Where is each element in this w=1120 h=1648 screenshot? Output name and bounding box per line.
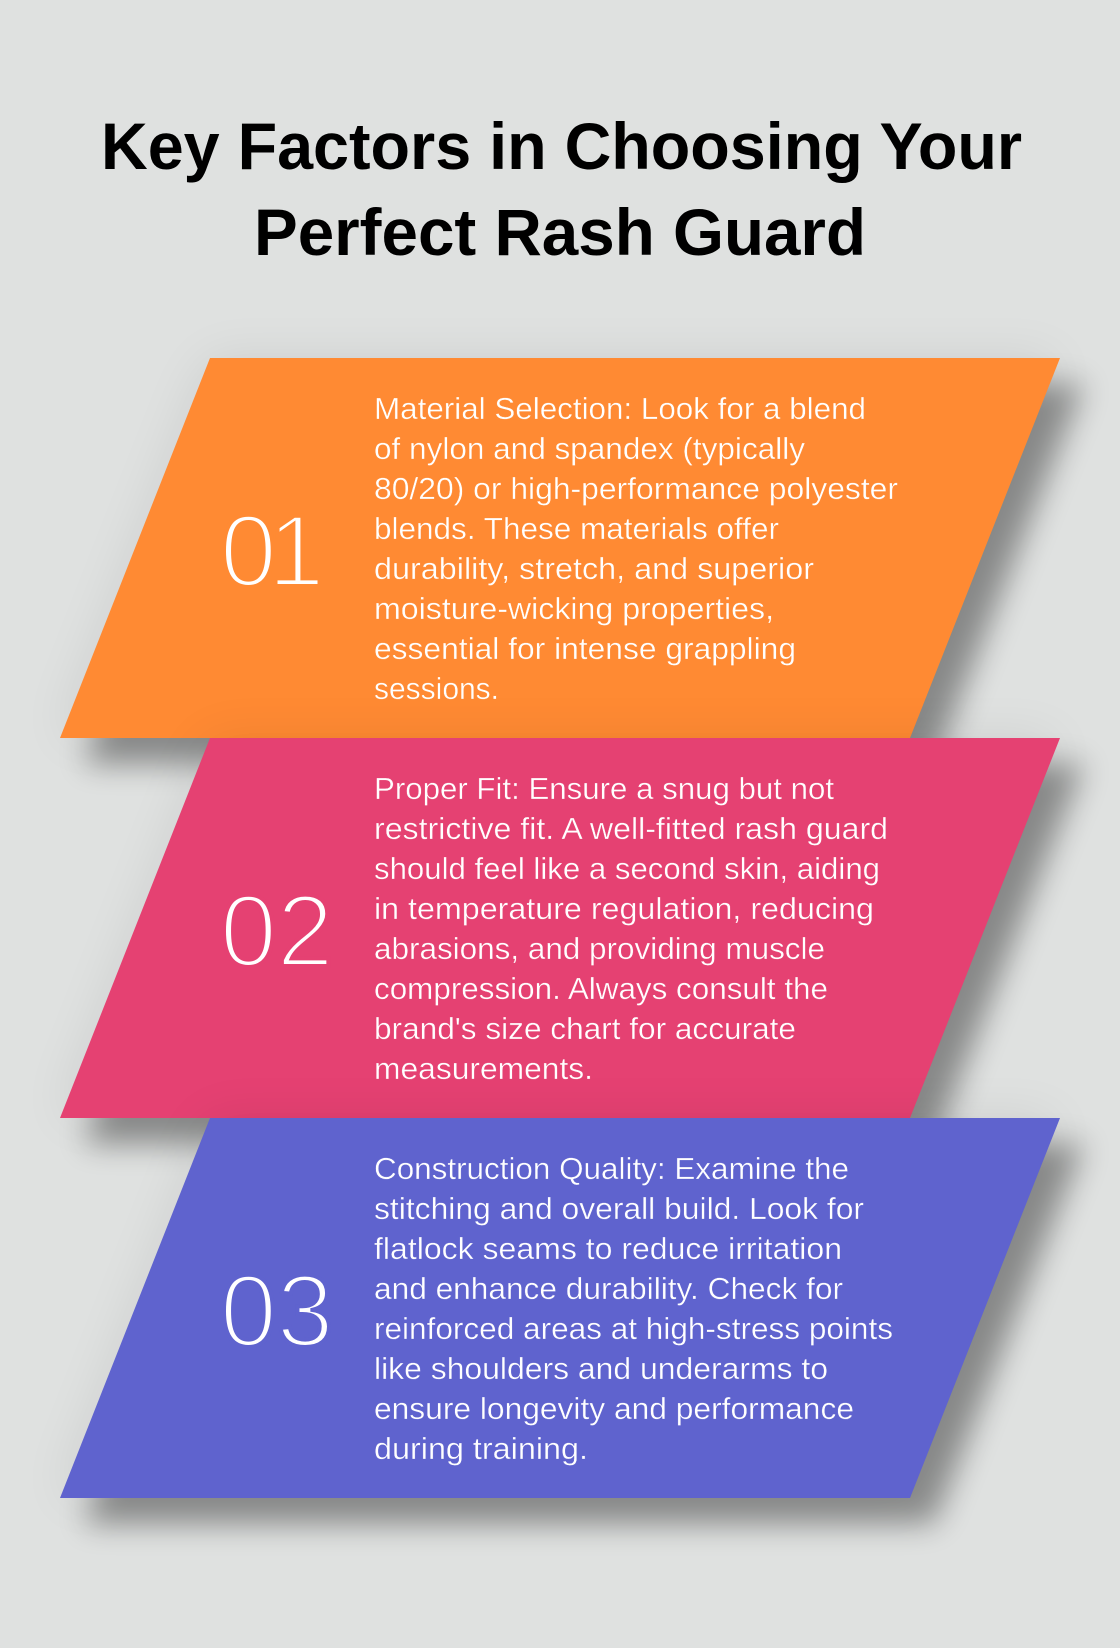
panel 01 text: of nylon and spandex (typically	[374, 432, 806, 466]
panel 03 shadow	[60, 1118, 1084, 1524]
panel 03 text: during training.	[374, 1432, 588, 1466]
panel 03 text: reinforced areas at high-stress points	[374, 1312, 893, 1346]
panel 03 text: stitching and overall build. Look for	[374, 1192, 864, 1226]
panel 03 text: flatlock seams to reduce irritation	[374, 1232, 842, 1266]
panel 03 text: like shoulders and underarms to	[374, 1352, 828, 1386]
title: Perfect Rash Guard	[254, 195, 866, 269]
panel 01 parallelogram	[60, 358, 1060, 738]
number 02: 02	[220, 874, 333, 988]
panel 02 text: measurements.	[374, 1052, 593, 1086]
panel 02 text: in temperature regulation, reducing	[374, 892, 874, 926]
panel 03 text: and enhance durability. Check for	[374, 1272, 843, 1306]
panel 02 text: brand's size chart for accurate	[374, 1012, 796, 1046]
title: Key Factors in Choosing Your	[101, 109, 1022, 183]
number 01: 01	[220, 494, 324, 608]
panel: 03 construction quality	[60, 1118, 1084, 1524]
panel 01 text: essential for intense grappling	[374, 632, 796, 666]
panel: 02 proper fit	[60, 738, 1084, 1144]
panel 03 parallelogram	[60, 1118, 1060, 1498]
panel 02 text: Proper Fit: Ensure a snug but not	[374, 772, 835, 806]
panel 03 text	[374, 1152, 893, 1466]
panel 01 text	[374, 392, 898, 706]
title	[101, 109, 1022, 269]
panel 01 text: blends. These materials offer	[374, 512, 779, 546]
panel 01 text: moisture-wicking properties,	[374, 592, 774, 626]
panel 01 text: Material Selection: Look for a blend	[374, 392, 866, 426]
panel 02 text: abrasions, and providing muscle	[374, 932, 825, 966]
panel 01 text: durability, stretch, and superior	[374, 552, 814, 586]
panel 02 text: should feel like a second skin, aiding	[374, 852, 880, 886]
panel 02 parallelogram	[60, 738, 1060, 1118]
panel 01 text: sessions.	[374, 672, 499, 706]
panel 03 text: Construction Quality: Examine the	[374, 1152, 849, 1186]
panel 02 shadow	[60, 738, 1084, 1144]
panel 03 text: ensure longevity and performance	[374, 1392, 854, 1426]
number 03: 03	[220, 1254, 333, 1368]
panel: 01 material selection	[60, 358, 1084, 764]
panel 02 text: restrictive fit. A well-fitted rash guard	[374, 812, 888, 846]
panel 02 text	[374, 772, 888, 1086]
panel 01 shadow	[60, 358, 1084, 764]
panel 01 text: 80/20) or high-performance polyester	[374, 472, 898, 506]
panel 02 text: compression. Always consult the	[374, 972, 828, 1006]
